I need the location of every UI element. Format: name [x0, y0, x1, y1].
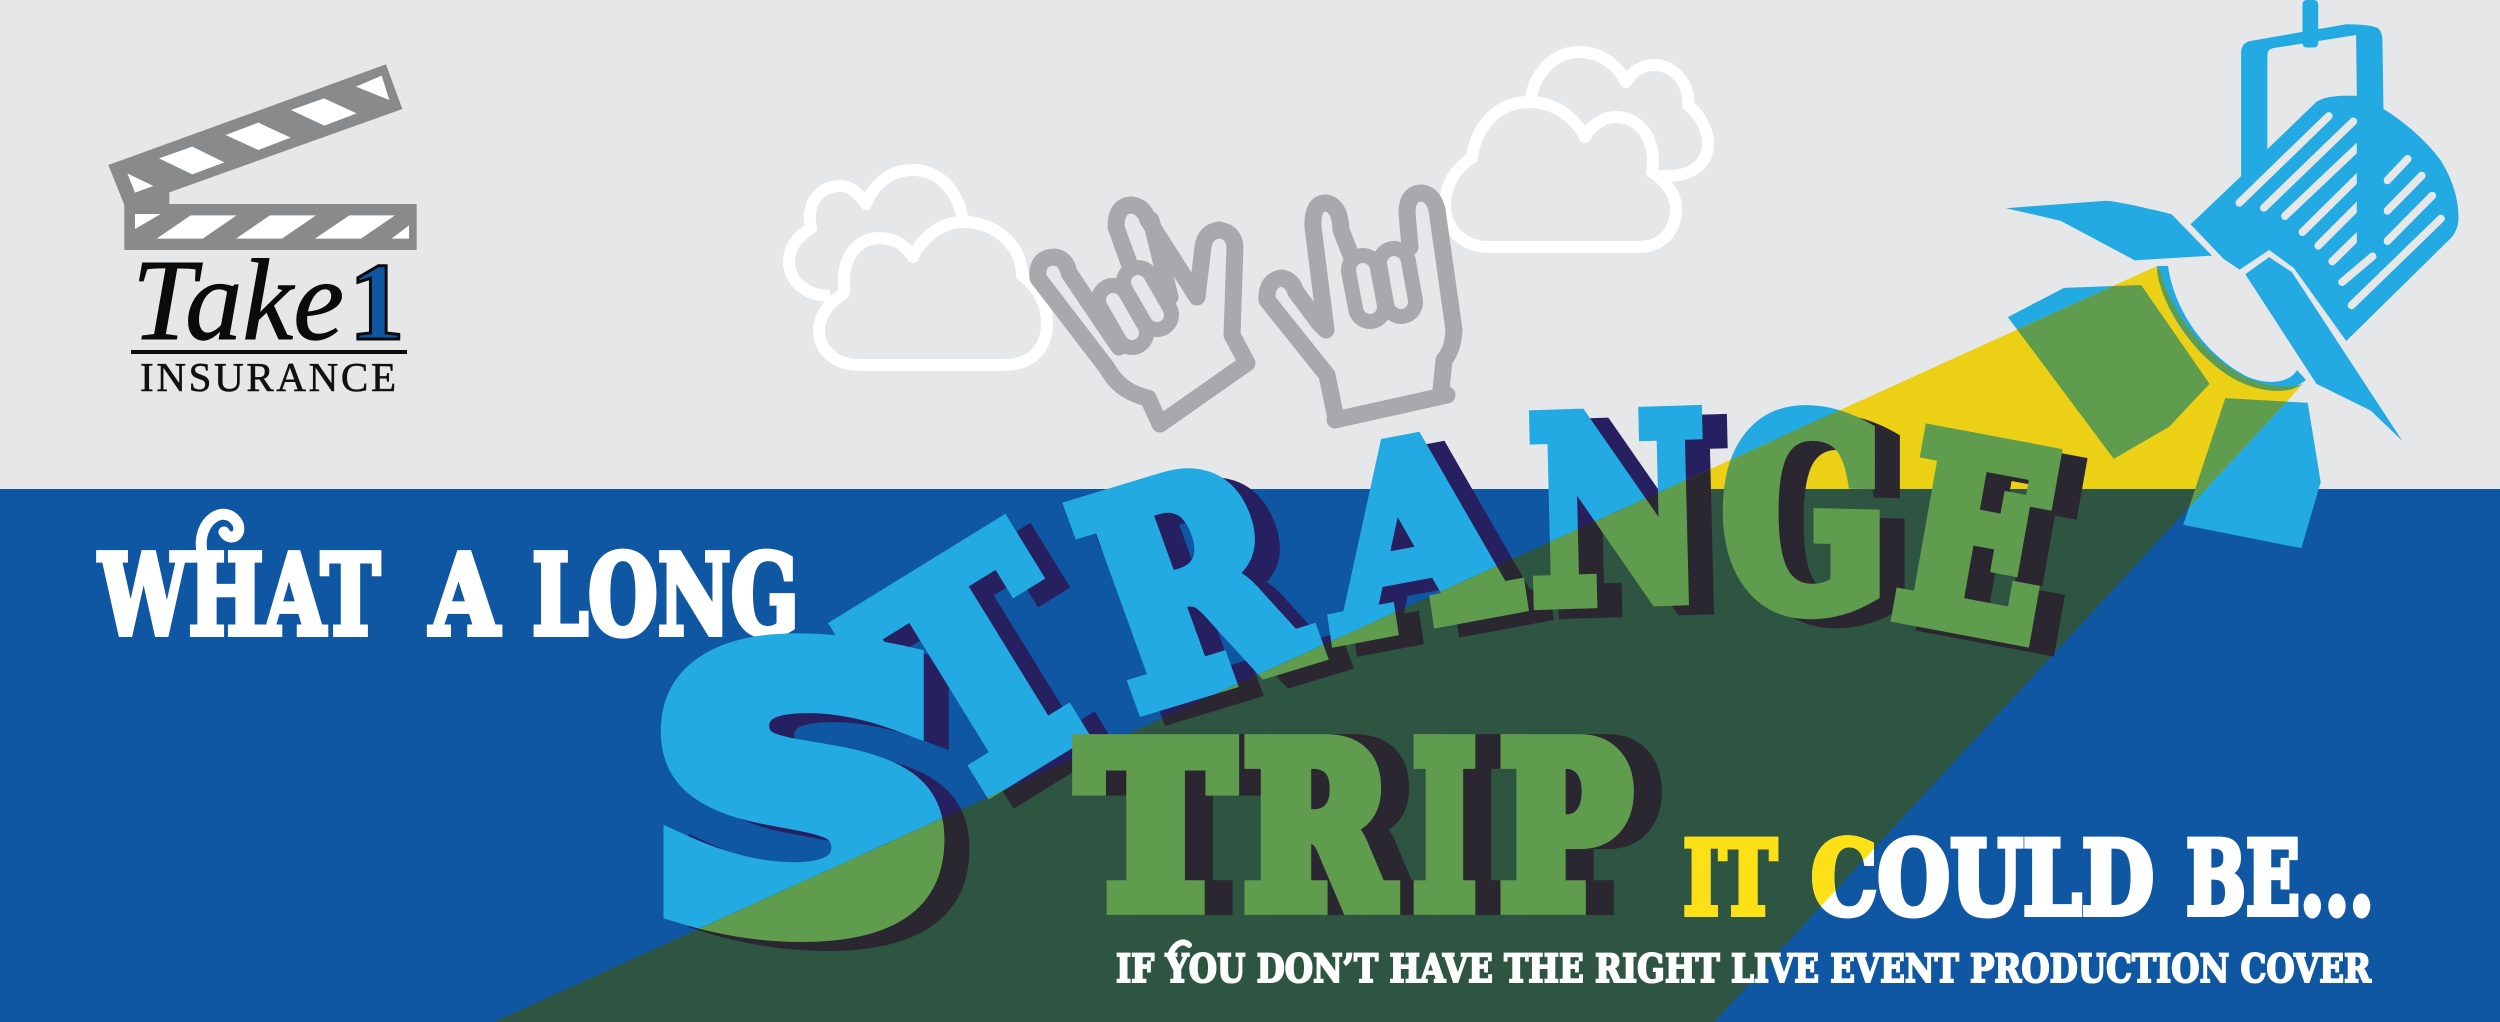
TRIP face: I [1414, 699, 1475, 956]
background: light grey sky [0, 0, 2500, 489]
TRIP shadow: P [1529, 699, 1658, 956]
lit letters shadow: S [672, 588, 984, 1020]
heading line: what a long: A [429, 531, 501, 661]
logo wordmark: Take: Take [132, 237, 344, 365]
lit letters shadow [696, 413, 2088, 951]
title letters face: N [1527, 363, 1708, 660]
word: COULD: COULD [1811, 819, 2154, 939]
lit letters shadow: E [1906, 390, 2099, 706]
lit letters face: S [647, 579, 959, 1011]
title letters face: T [808, 476, 1152, 868]
lit letters shadow: A [1330, 386, 1553, 703]
lit letters face: E [1881, 381, 2074, 697]
TRIP face [1080, 699, 1630, 956]
heading line: what a long [98, 514, 799, 661]
lit letters face: G [1722, 363, 1887, 669]
lit letters shadow: N [1552, 372, 1733, 669]
word: IT: IT [1683, 819, 1777, 939]
title letters drop shadow: G [1747, 372, 1912, 678]
TRIP face: T [1080, 699, 1231, 956]
icon: rock hand, right [1267, 193, 1454, 420]
word: BE...: BE... [2186, 819, 2374, 939]
background: blue floor [0, 489, 2500, 1022]
yellow lit part of the C: COULD [1811, 819, 2154, 939]
heading line: it could be [1684, 835, 2370, 918]
TRIP face: P [1501, 699, 1630, 956]
TRIP shadow: I [1442, 699, 1503, 956]
title letters face: A [1305, 377, 1528, 694]
lit letters face: N [1527, 363, 1708, 660]
TRIP shadow: T [1108, 699, 1259, 956]
lit letters face: A [1305, 377, 1528, 694]
title letters drop shadow: S [672, 588, 984, 1020]
logo rule [131, 350, 407, 354]
title letters face: G [1722, 363, 1887, 669]
title word: STRANGE [647, 363, 2099, 1020]
barn doors lit by the beam [2017, 285, 2286, 508]
icon: white clouds, right [1445, 52, 1708, 247]
title letters face: R [1044, 402, 1340, 771]
logo: Take 1 Insurance [108, 64, 417, 400]
title letters drop shadow: A [1330, 386, 1553, 703]
title letters drop shadow [672, 372, 2099, 1020]
icon: rock hand, left [1038, 205, 1247, 424]
title letters drop shadow: T [833, 485, 1177, 877]
logo wordmark: 1: 1 [349, 241, 404, 364]
title letters face: S [647, 579, 959, 1011]
title letters drop shadow: N [1552, 372, 1733, 669]
icon: white clouds, left [789, 170, 1047, 365]
title letters drop shadow: R [1069, 411, 1365, 780]
TRIP shadow: R [1273, 699, 1420, 956]
lit letters shadow: G [1747, 372, 1912, 678]
decorative swash on the Y of the subheading [1170, 942, 1189, 957]
decorative swash above the H [201, 514, 239, 552]
icon: spotlight lens crescent [2157, 266, 2306, 391]
title word: TRIP [1080, 699, 1658, 956]
lit letters face: T [808, 476, 1152, 868]
title letters drop shadow: E [1906, 390, 2099, 706]
logo wordmark: Insurance: INSURANCE [140, 354, 396, 400]
heading line: what a long: LONG [532, 531, 799, 661]
lit title letters [696, 410, 2088, 951]
beam on grey wall [1666, 266, 2301, 489]
icon: stage spotlight [2006, 0, 2459, 548]
icon: clapperboard [108, 64, 417, 250]
lit letters face: R [1044, 402, 1340, 771]
heading line: what a long: WHAT [98, 531, 380, 661]
lit letters shadow: T [833, 485, 1177, 877]
TRIP shadow [1108, 699, 1658, 956]
title letters face: E [1881, 381, 2074, 697]
beam on blue floor [494, 489, 2206, 1022]
lit letters shadow: R [1069, 411, 1365, 780]
title letters face [647, 363, 2074, 1011]
light beam with lit title letters [494, 266, 2301, 1022]
lit letters face [699, 410, 2062, 942]
TRIP face: R [1245, 699, 1392, 956]
